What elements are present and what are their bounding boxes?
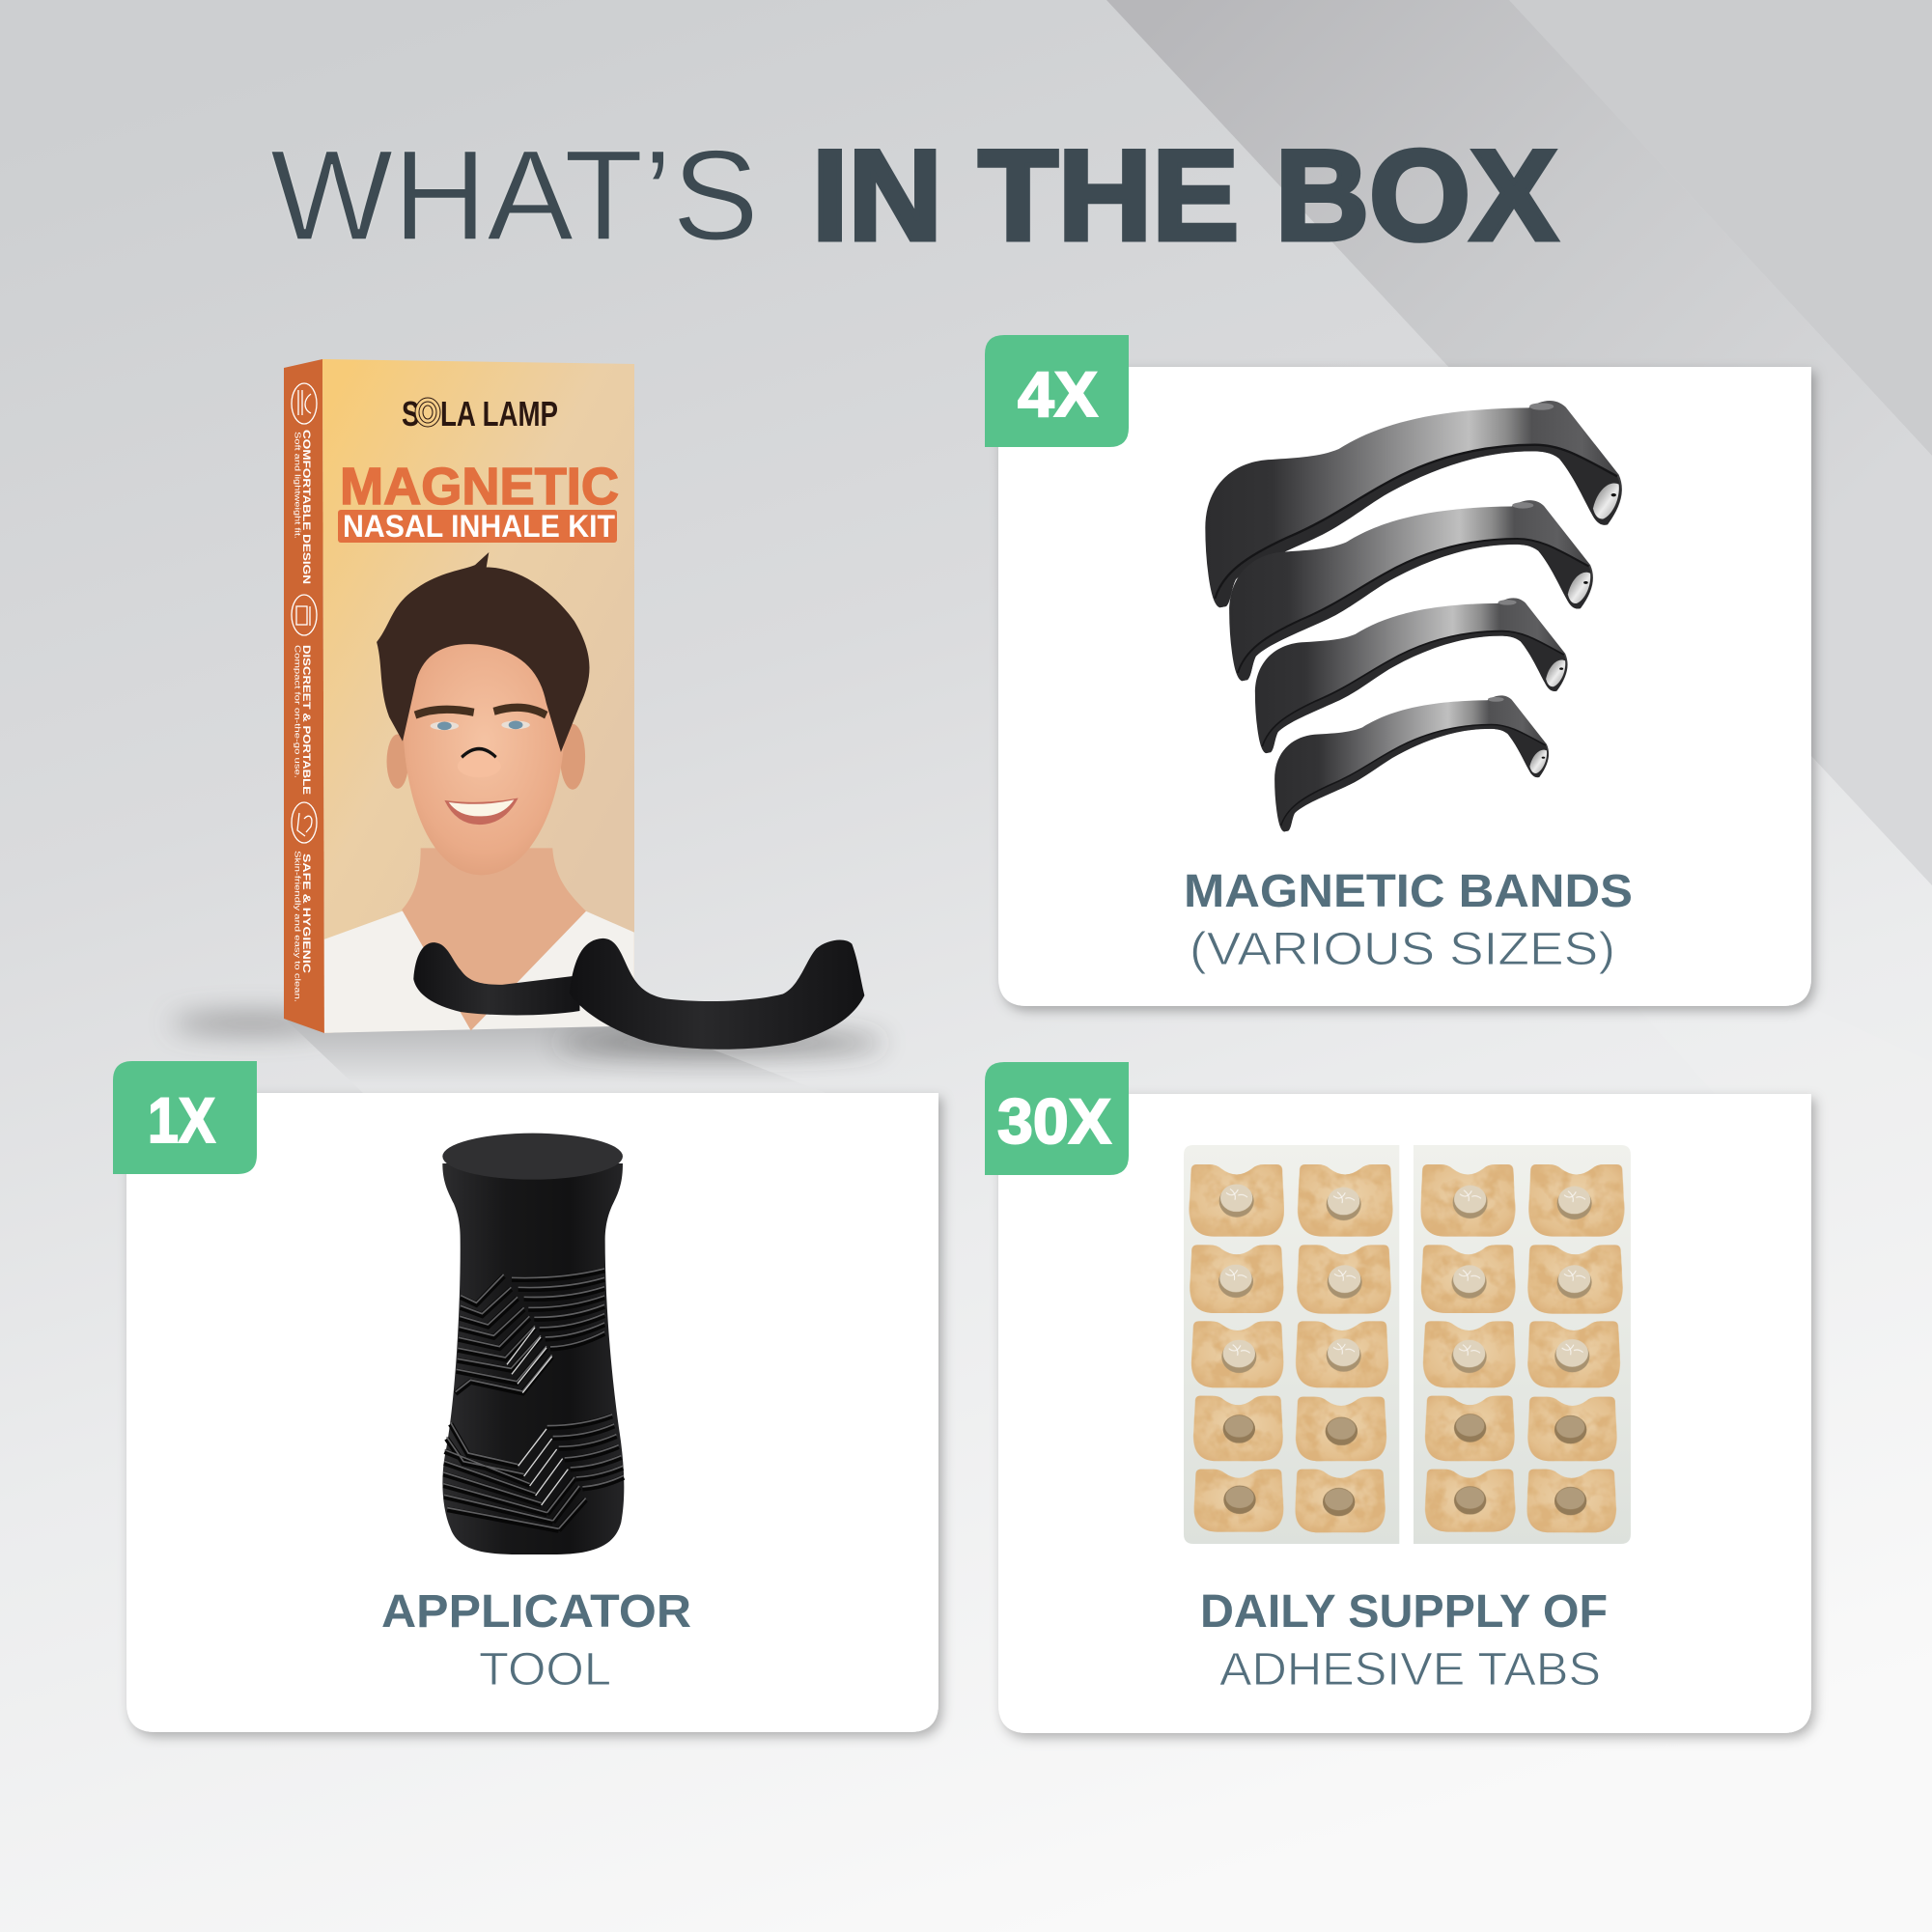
- quantity badge 1X: [113, 1061, 257, 1174]
- portrait of man wearing the nasal band: [324, 552, 634, 1033]
- panel: magnetic bands: [985, 335, 1811, 1006]
- label: MAGNETIC BANDS: [1184, 866, 1633, 917]
- box front face: [322, 359, 634, 1033]
- card: [998, 367, 1811, 1006]
- tab stickers: [1190, 1164, 1624, 1532]
- label: [381, 1586, 691, 1695]
- brand logo: SOLA LAMP: [402, 394, 558, 434]
- spine feature text: [294, 430, 312, 1002]
- spine icons: [292, 383, 317, 843]
- illustration: two sheets of adhesive tabs: [1184, 1145, 1631, 1544]
- quantity badge 4X: 4X: [1018, 358, 1098, 430]
- card: [126, 1093, 938, 1732]
- quantity badge 4X: [985, 335, 1129, 447]
- box spine: [284, 359, 324, 1033]
- label: DAILY SUPPLY OF: [1200, 1586, 1608, 1638]
- domed centres: [1218, 1184, 1592, 1516]
- spine feature text: Soft and lightweight fit.: [294, 432, 303, 539]
- box subheading bar: NASAL INHALE KIT: [343, 509, 615, 544]
- label: [1200, 1586, 1608, 1695]
- card: [998, 1094, 1811, 1733]
- label: ADHESIVE TABS: [1219, 1644, 1601, 1695]
- quantity badge 1X: 1X: [148, 1084, 215, 1156]
- label: (VARIOUS SIZES): [1190, 924, 1615, 975]
- title: WHAT’S: [270, 125, 759, 267]
- spine feature text: SAFE & HYGIENIC: [300, 854, 312, 973]
- label: [1184, 866, 1633, 975]
- panel: product box hero: [171, 359, 884, 1093]
- spine feature text: Compact for on-the-go use.: [294, 645, 303, 778]
- quantity badge 30X: 30X: [997, 1085, 1111, 1157]
- label: APPLICATOR: [381, 1586, 691, 1638]
- spine feature text: COMFORTABLE DESIGN: [300, 430, 312, 584]
- illustration: applicator: [442, 1134, 624, 1554]
- label: TOOL: [479, 1644, 611, 1695]
- quantity badge 30X: [985, 1062, 1129, 1175]
- spine feature text: DISCREET & PORTABLE: [300, 645, 312, 795]
- ground shadow under box: [171, 1014, 884, 1093]
- panel: applicator tool: [113, 1061, 938, 1732]
- spine feature text: Skin-friendly and easy to clean.: [294, 851, 303, 1002]
- panel: adhesive tabs: [985, 1062, 1811, 1733]
- title: IN THE BOX: [812, 125, 1557, 267]
- illustration: four magnetic bands: [1205, 401, 1622, 831]
- title: [270, 125, 1557, 267]
- backing sheets: [1184, 1145, 1631, 1544]
- black nasal bands in front of box: [413, 938, 864, 1050]
- box heading: MAGNETIC: [340, 458, 619, 516]
